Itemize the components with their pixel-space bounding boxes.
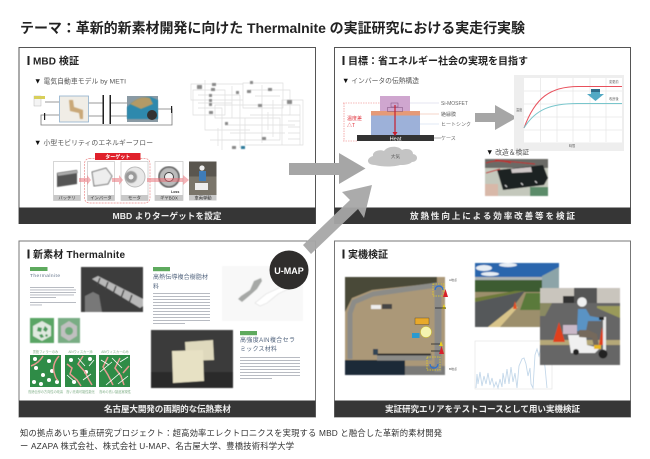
map: test course aerial view: A地点: [449, 277, 457, 282]
caption bar: MBD: [19, 208, 316, 224]
chart: driving pattern: [475, 341, 552, 389]
panel: real vehicle validation: [334, 241, 630, 417]
photo: rider on mobility vehicle: [540, 288, 620, 365]
photo: ceramic plates: [151, 330, 233, 388]
component: motor: [121, 162, 148, 202]
badge: U-MAP: U-MAP: [274, 266, 304, 276]
label: temperature difference: 温度差: [347, 115, 362, 122]
energy flow arrows: [79, 175, 189, 185]
component: gearbox: ギヤBOX: [160, 196, 178, 201]
chart: efficiency curves: 改良後: [609, 96, 619, 101]
footer: project and participants: 知の拠点あいち重点研究プロジェクト：超高効率エレクトロニクスを実現する MBD と融合した革新的素材開発: [20, 428, 443, 438]
column: high thermal conductivity resin: 料: [153, 282, 159, 290]
chart: efficiency curves: 温度: [516, 107, 523, 112]
label: temperature difference: △T: [347, 122, 355, 129]
badge: U-MAP: [270, 250, 308, 290]
component: gearbox: [155, 162, 183, 201]
column: high thermal conductivity resin: [153, 267, 210, 324]
caption bar: target: [334, 208, 630, 224]
title: テーマ：革新的新素材開発に向けた Thermalnite の実証研究における実走行実験: [20, 20, 525, 36]
subheading: energy flow: ▼ 小型モビリティのエネルギーフロー: [34, 138, 153, 147]
panel: target: [334, 48, 630, 224]
photo: molded resin samples: [222, 266, 303, 321]
chart: efficiency curves: [514, 75, 624, 151]
panel heading: real vehicle validation: 実機検証: [348, 248, 388, 261]
component: inverter: インバータ: [90, 195, 112, 202]
icon: atmosphere cloud: 大気: [391, 153, 400, 160]
label: temperature difference: [347, 115, 362, 129]
component: gearbox: Loss: [171, 190, 179, 194]
caption bar: target: 放熱性向上による効率改善等を検証: [410, 210, 575, 221]
images: filler cube renderings: [30, 318, 80, 343]
component: battery: バッテリ: [58, 196, 76, 202]
component: motor: モータ: [128, 195, 141, 202]
panel heading: target: 目標：省エネルギー社会の実現を目指す: [348, 54, 528, 68]
map: test course aerial view: B地点: [449, 366, 457, 371]
structure labels: ヒートシンク: [441, 122, 471, 128]
structure labels: 絶縁膜: [441, 111, 456, 118]
caption bar: MBD: MBD よりターゲットを設定: [112, 210, 222, 221]
subheading: EV model: ▼ 電気自動車モデル by METI: [34, 76, 126, 86]
chart: efficiency curves: 時間: [569, 143, 575, 148]
diagram: three filler structures: 高熱伝導の方向性の改善: [28, 389, 64, 394]
arrow: material to target via U-MAP: [303, 185, 372, 254]
photo: test road: [475, 263, 559, 327]
diagram: three filler structures: 高めの高い製品実現性: [99, 389, 132, 394]
panel: new material: [19, 241, 316, 417]
diagram: electric vehicle model: [34, 95, 172, 125]
diagram: inverter heat transfer structure: [343, 96, 471, 142]
footer: project and participants: [20, 428, 443, 451]
subheading: modification and validation: ▼ 改造＆検証: [486, 148, 529, 156]
diagram: energy flow with target: [54, 153, 216, 203]
column: high strength AlN composite ceramic: 高強度AlN複合セラ: [240, 336, 295, 344]
panel heading: new material: 新素材 Thermalnite: [33, 248, 125, 261]
caption bar: validation: [334, 400, 630, 417]
panel heading: MBD verification: MBD 検証: [33, 54, 79, 68]
target label: [95, 153, 140, 161]
photo: filler micrograph: [81, 267, 143, 312]
panel: MBD verification: [19, 48, 316, 224]
caption bar: material: [19, 400, 316, 417]
target label: ターゲット: [105, 154, 130, 161]
caption bar: material: 名古屋大開発の画期的な伝熱素材: [104, 403, 231, 414]
photo: modified inverter: [485, 159, 548, 196]
structure labels: [441, 101, 471, 142]
component: inverter: [88, 162, 114, 202]
footer: project and participants: ー AZAPA 株式会社、株式会社 U-MAP、名古屋大学、豊橋技術科学大学: [20, 441, 294, 451]
icon: atmosphere cloud: [368, 147, 417, 166]
diagram: three filler structures: 黒鉛フィラーのみ: [33, 349, 59, 354]
structure labels: Si-MOSFET: [441, 101, 468, 107]
column: high strength AlN composite ceramic: [240, 331, 300, 379]
column: high thermal conductivity resin: 高熱伝導複合樹脂材: [153, 273, 208, 281]
caption bar: validation: 実証研究エリアをテストコースとして用い実機検証: [385, 403, 580, 414]
target outline: [84, 158, 150, 203]
diagram: inverter heat transfer structure: Heat: [390, 136, 402, 142]
component: battery: [54, 162, 80, 202]
intro column: Thermalnite: [30, 267, 76, 305]
diagram: three filler structures: [28, 349, 132, 394]
intro column: Thermalnite: Thermalnite: [30, 273, 60, 279]
map: test course aerial view: [345, 277, 457, 375]
structure labels: ケース: [441, 135, 456, 142]
column: high strength AlN composite ceramic: ミックス材料: [240, 345, 277, 353]
arrow: MBD to target: [289, 153, 366, 184]
diagram: three filler structures: 高い充填可能性能化: [66, 389, 96, 394]
diagram: three filler structures: AlNウィスカーのみ: [101, 349, 130, 354]
component: vehicle: [189, 162, 216, 202]
component: vehicle: 車両挙動: [194, 195, 212, 202]
diagram: detailed simulation block model: [191, 80, 303, 150]
arrow: structure to chart: [475, 105, 517, 130]
chart: efficiency curves: 変更前: [609, 79, 619, 84]
diagram: three filler structures: AlNウィスカー添: [68, 349, 93, 354]
subheading: inverter heat structure: ▼ インバータの伝熱構造: [342, 76, 419, 85]
